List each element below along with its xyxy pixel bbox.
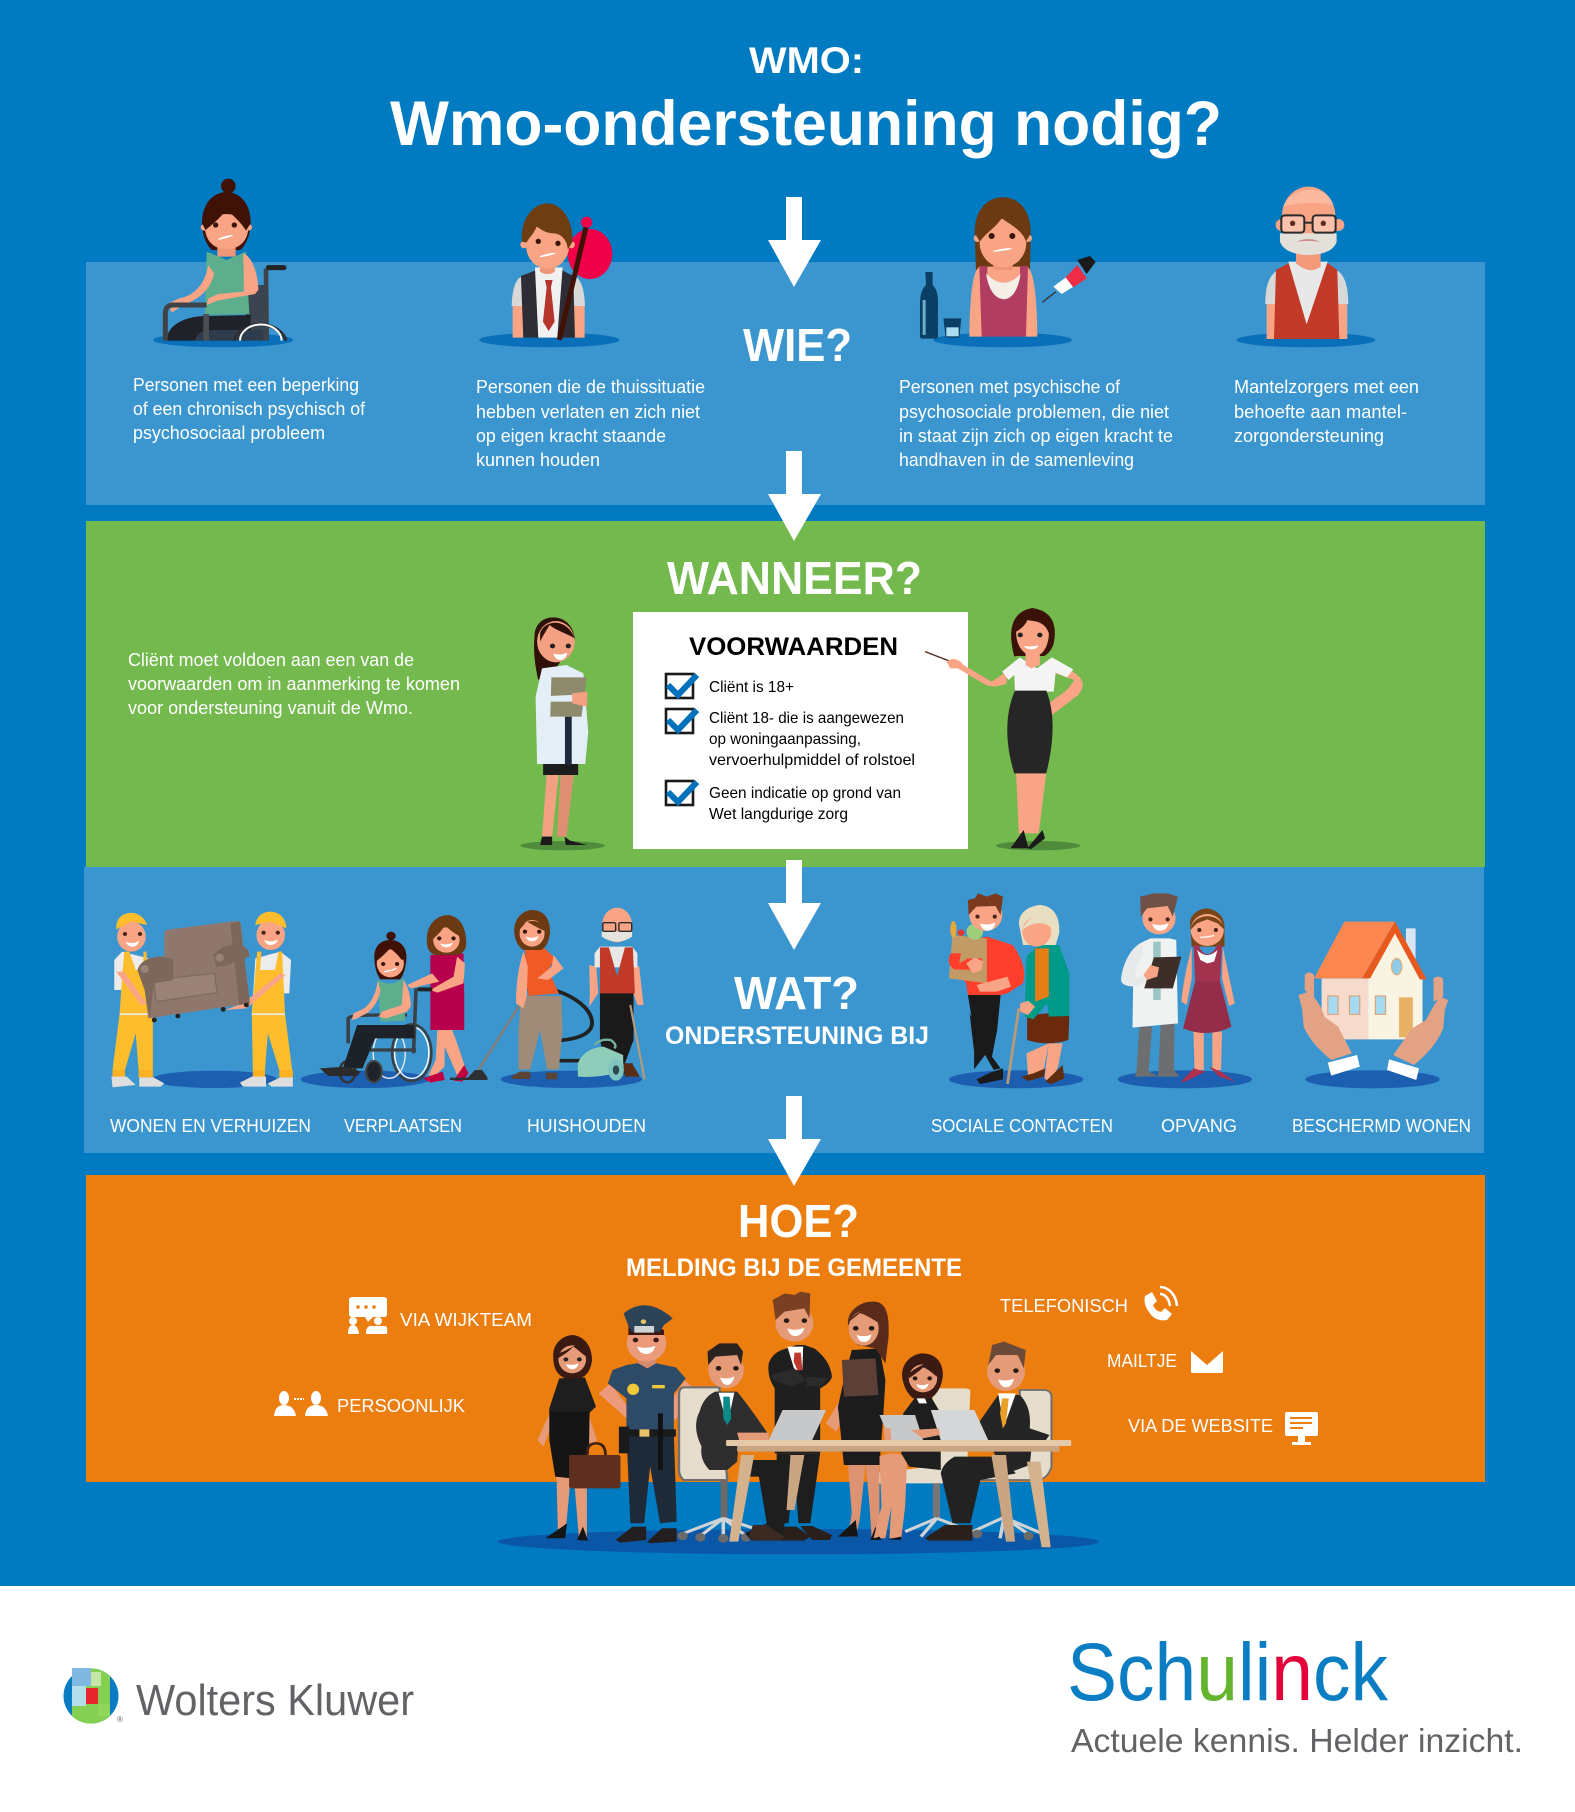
illustration: movers carrying armchair — [111, 912, 293, 1088]
illustration: teacher with pointer — [925, 608, 1083, 850]
text: clientvoorwaarde — [128, 650, 460, 718]
illustration: team at table — [498, 1292, 1099, 1554]
table — [726, 1440, 1071, 1547]
tagline: Actuele kennis. Helder inzicht. — [1071, 1722, 1523, 1759]
arrow 2 — [768, 451, 821, 541]
heading: wat: WAT? — [734, 967, 859, 1019]
text: personen met een beperking: of een chronisch psychisch of — [133, 399, 366, 419]
item: telefonisch: TELEFONISCH — [1000, 1296, 1128, 1316]
text: psychische problemen — [899, 377, 1173, 470]
icon: wijkteam — [348, 1297, 387, 1334]
item: via de website — [1128, 1412, 1318, 1445]
icon: checkbox 1 — [666, 674, 697, 698]
labels: ondersteuningsvormen: SOCIALE CONTACTEN — [931, 1116, 1113, 1136]
item: mailtje — [1107, 1350, 1223, 1373]
illustration: woman in wheelchair — [153, 179, 293, 347]
logo mark — [64, 1668, 118, 1724]
card: voorwaarden: vervoerhulpmiddel of rolstoel — [709, 752, 915, 769]
icon: envelop — [1191, 1350, 1223, 1373]
panel: wie — [86, 262, 1485, 505]
text: psychische problemen: psychosociale problemen, die niet — [899, 402, 1169, 422]
illustration: woman vacuuming with old man — [450, 908, 645, 1088]
card: voorwaarden: Wet langdurige zorg — [709, 806, 848, 823]
illustration: woman in wheelchair with helper — [301, 915, 469, 1088]
logo: wolters kluwer: ® — [117, 1715, 123, 1724]
arrow 1 — [768, 197, 821, 287]
person: seated man right — [925, 1342, 1049, 1541]
subheading: melding bij de gemeente: MELDING BIJ DE GEMEENTE — [626, 1254, 962, 1282]
person: woman with book — [826, 1302, 889, 1540]
text: psychische problemen: in staat zijn zich op eigen kracht te — [899, 426, 1173, 446]
card: voorwaarden: op woningaanpassing, — [709, 731, 861, 748]
item: via wijkteam — [348, 1297, 532, 1334]
icon: persoonlijk — [274, 1391, 328, 1416]
item: via wijkteam: VIA WIJKTEAM — [400, 1310, 532, 1330]
card: voorwaarden: Cliënt 18- die is aangewezen — [709, 710, 904, 727]
text: mantelzorgers: Mantelzorgers met een — [1234, 377, 1419, 397]
labels: ondersteuningsvormen — [110, 1116, 1471, 1136]
chair: seated man right — [957, 1390, 1051, 1540]
heading: wie: WIE? — [743, 319, 852, 371]
arrow 4 — [768, 1096, 821, 1186]
logo: schulinck — [1067, 1627, 1523, 1759]
text: mantelzorgers: behoefte aan mantel- — [1234, 402, 1407, 422]
icon: checkbox 3 — [666, 781, 697, 805]
text: mantelzorgers: zorgondersteuning — [1234, 426, 1384, 446]
labels: ondersteuningsvormen: OPVANG — [1161, 1116, 1237, 1136]
labels: ondersteuningsvormen: VERPLAATSEN — [344, 1116, 462, 1136]
card: voorwaarden: Cliënt is 18+ — [709, 679, 794, 696]
title block — [390, 40, 1222, 159]
text: thuissituatie verlaten: kunnen houden — [476, 450, 600, 470]
arrow 3 — [768, 860, 821, 950]
illustration: old man with glasses — [1237, 187, 1375, 347]
illustration: doctor with file — [521, 617, 605, 850]
icon: monitor — [1285, 1412, 1318, 1445]
text: mantelzorgers — [1234, 377, 1419, 446]
person: woman with briefcase — [537, 1335, 620, 1541]
illustration: homeless man with bundle — [479, 203, 619, 347]
illustration: man with groceries and elderly woman — [949, 893, 1083, 1088]
text: personen met een beperking: psychosociaal probleem — [133, 423, 325, 443]
logo: wolters kluwer — [64, 1668, 414, 1725]
item: telefonisch — [1000, 1287, 1177, 1320]
chair: seated woman right — [874, 1388, 976, 1537]
text: clientvoorwaarde: voor ondersteuning vanuit de Wmo. — [128, 698, 413, 718]
item: persoonlijk: PERSOONLIJK — [337, 1396, 465, 1416]
text: thuissituatie verlaten: hebben verlaten en zich niet — [476, 402, 700, 422]
person: standing man — [768, 1292, 832, 1541]
title block: Wmo-ondersteuning nodig? — [390, 89, 1222, 159]
panel: hoe — [86, 1175, 1485, 1482]
subheading: ondersteuning bij: ONDERSTEUNING BIJ — [665, 1022, 929, 1050]
heading: wanneer: WANNEER? — [667, 552, 922, 604]
person: police officer — [599, 1305, 692, 1543]
logo: schulinck: Schulinck — [1067, 1627, 1389, 1718]
person: seated man left — [696, 1343, 791, 1541]
illustration: woman with bottle and syringe — [920, 197, 1096, 347]
person: seated woman — [870, 1353, 943, 1540]
labels: ondersteuningsvormen: WONEN EN VERHUIZEN — [110, 1116, 311, 1136]
labels: ondersteuningsvormen: HUISHOUDEN — [527, 1116, 646, 1136]
title block: WMO: — [749, 40, 864, 81]
text: clientvoorwaarde: Cliënt moet voldoen aan een van de — [128, 650, 414, 670]
text: personen met een beperking: Personen met een beperking — [133, 375, 359, 395]
text: thuissituatie verlaten: Personen die de thuissituatie — [476, 377, 705, 397]
text: psychische problemen: handhaven in de samenleving — [899, 450, 1134, 470]
card: voorwaarden: Geen indicatie op grond van — [709, 785, 901, 802]
panel: wat — [84, 867, 1484, 1153]
text: clientvoorwaarde: voorwaarden om in aanmerking te komen — [128, 674, 460, 694]
icon: checkbox 2 — [666, 709, 697, 733]
text: personen met een beperking — [133, 375, 366, 443]
card: voorwaarden — [633, 612, 968, 849]
item: mailtje: MAILTJE — [1107, 1351, 1177, 1371]
heading: hoe: HOE? — [738, 1195, 859, 1247]
item: via de website: VIA DE WEBSITE — [1128, 1416, 1273, 1436]
chair: seated man left — [677, 1387, 759, 1543]
labels: ondersteuningsvormen: BESCHERMD WONEN — [1292, 1116, 1471, 1136]
text: thuissituatie verlaten: op eigen kracht staande — [476, 426, 666, 446]
laptops and tablet — [769, 1410, 988, 1440]
item: persoonlijk — [274, 1391, 465, 1416]
icon: telefoon — [1144, 1287, 1177, 1320]
logo: wolters kluwer: Wolters Kluwer — [136, 1676, 414, 1725]
card: voorwaarden: VOORWAARDEN — [689, 633, 898, 661]
panel: wanneer — [86, 521, 1485, 867]
illustration: hands holding house — [1299, 922, 1448, 1088]
text: psychische problemen: Personen met psychische of — [899, 377, 1121, 397]
illustration: doctor and girl — [1118, 893, 1252, 1088]
text: thuissituatie verlaten — [476, 377, 705, 470]
